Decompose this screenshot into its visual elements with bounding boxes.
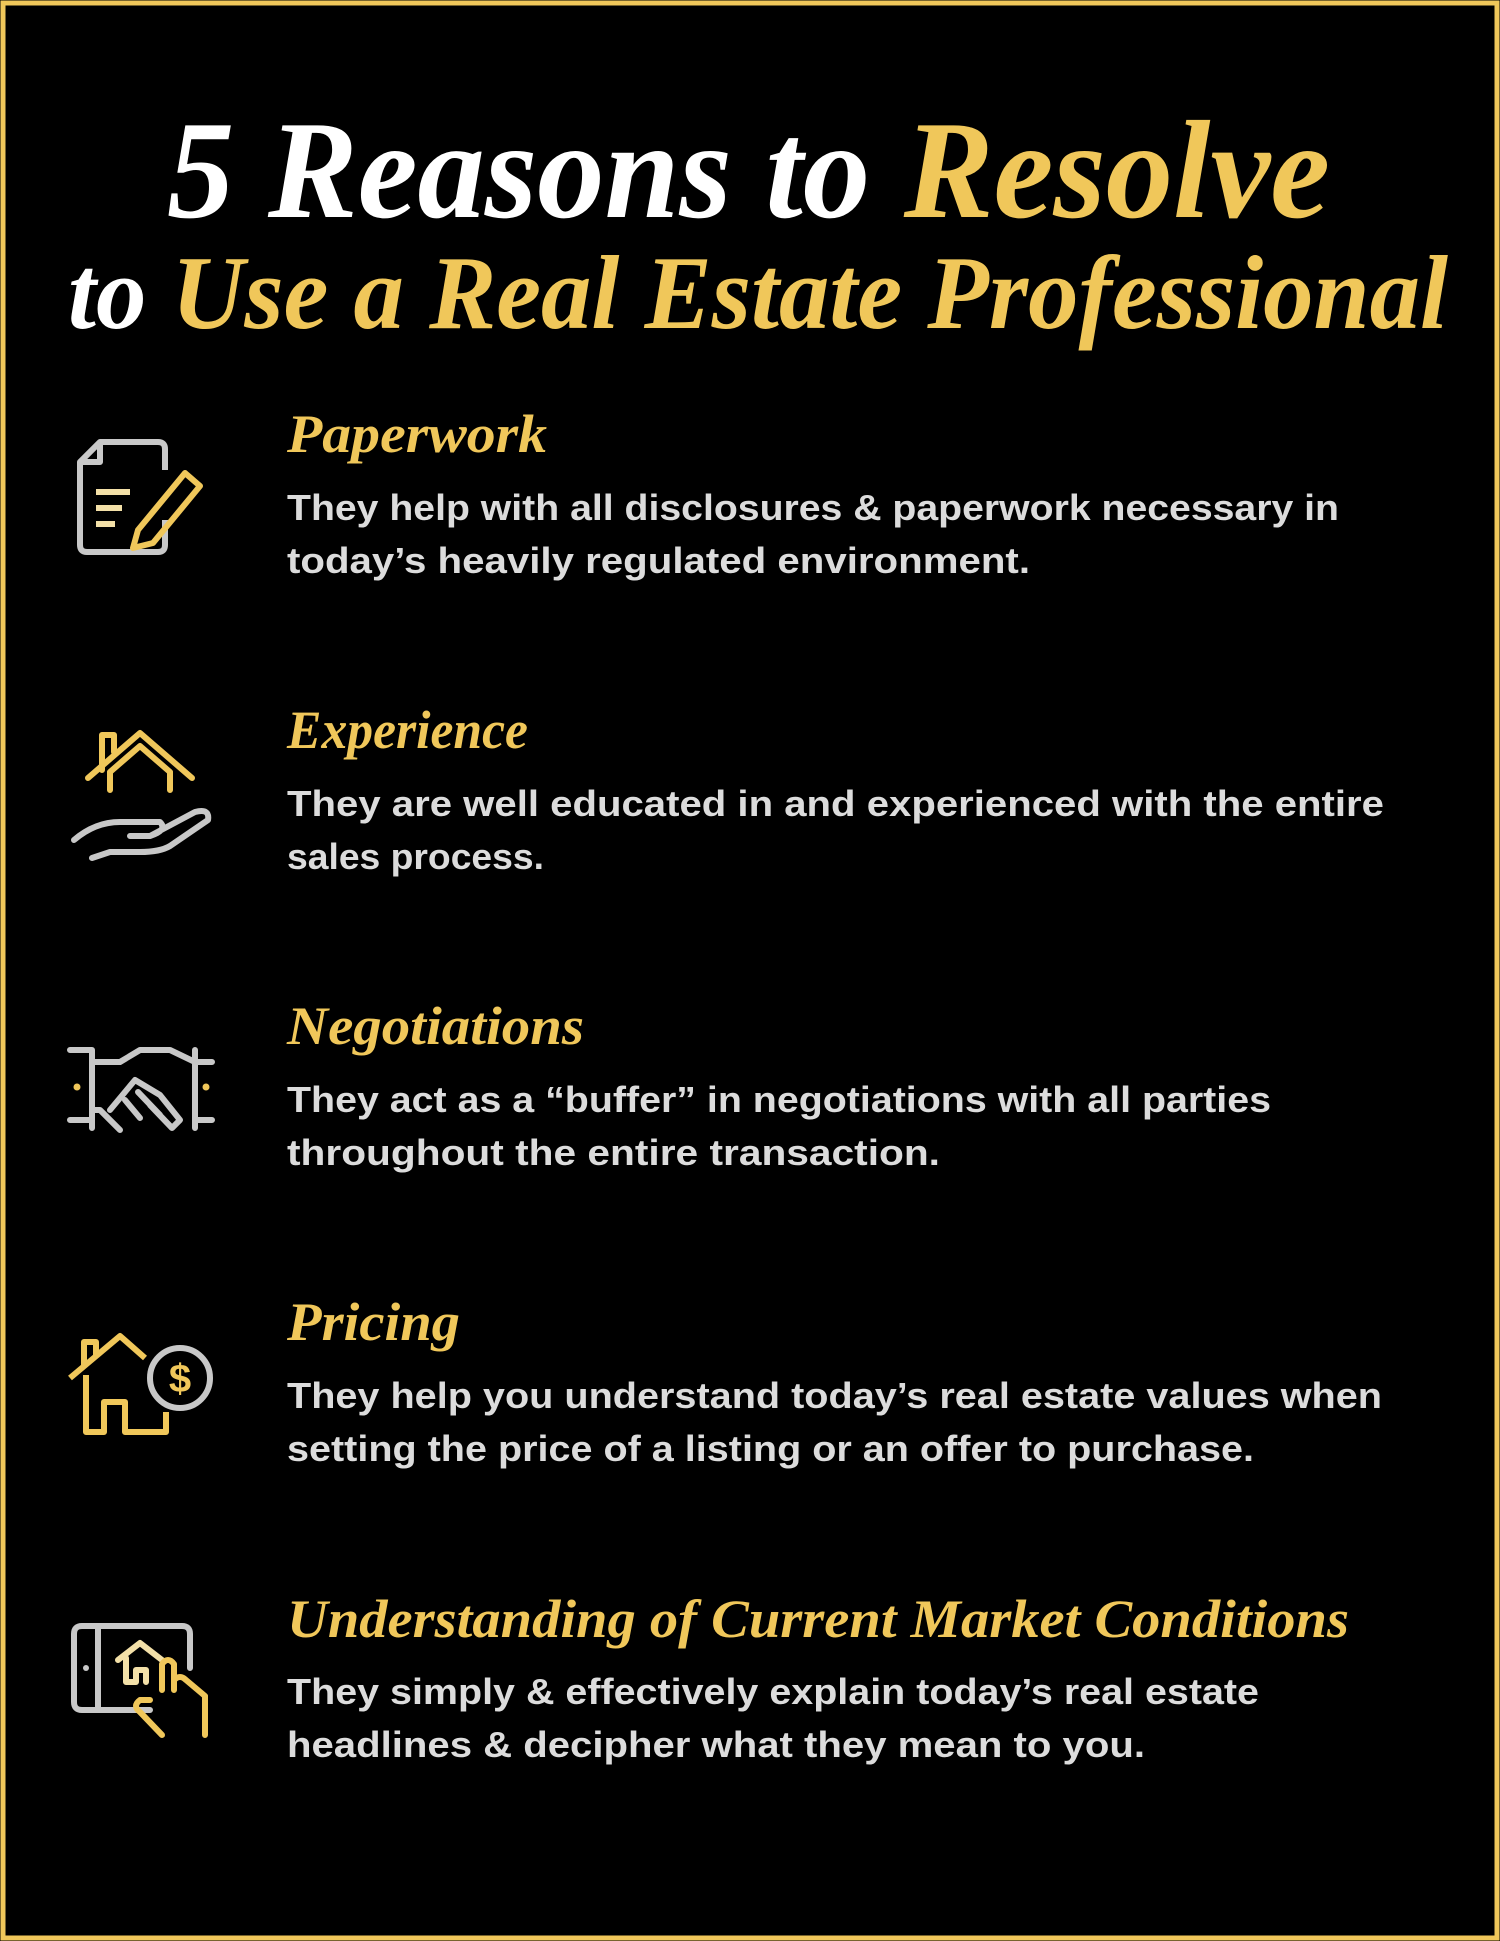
heading: Pricing: Pricing <box>286 1292 460 1352</box>
icon: house with dollar coin: $ <box>169 1357 191 1401</box>
text: experience: sales process. <box>287 836 544 877</box>
section: market conditions <box>74 1589 1349 1765</box>
icon: house with dollar coin <box>70 1336 210 1432</box>
text: negotiations <box>287 1079 1271 1173</box>
text: negotiations: They act as a “buffer” in negotiations with all parties <box>287 1079 1271 1120</box>
text: negotiations: throughout the entire transaction. <box>287 1132 940 1173</box>
text: market conditions: headlines & decipher what they mean to you. <box>287 1724 1145 1765</box>
text: pricing: They help you understand today’s real estate values when <box>287 1375 1382 1416</box>
title <box>68 93 1449 351</box>
title: to Use a Real Estate Professional <box>68 234 1449 351</box>
text: experience: They are well educated in and experienced with the entire <box>287 783 1384 824</box>
section: pricing <box>70 1292 1382 1469</box>
text: paperwork: They help with all disclosures & paperwork necessary in <box>287 487 1339 528</box>
heading: Understanding of Current Market Conditions: Understanding of Current Market Conditions <box>287 1589 1349 1649</box>
text: pricing: setting the price of a listing or an offer to purchase. <box>287 1428 1254 1469</box>
text: paperwork: today’s heavily regulated environment. <box>287 540 1030 581</box>
heading: Negotiations: Negotiations <box>286 996 584 1056</box>
icon: tablet with house and finger <box>74 1626 205 1735</box>
section: paperwork <box>80 404 1339 581</box>
text: paperwork <box>287 487 1339 581</box>
heading: Paperwork: Paperwork <box>286 404 547 464</box>
heading: Experience: Experience <box>286 700 528 760</box>
text: experience <box>287 783 1384 877</box>
section: experience <box>74 700 1384 877</box>
title: 5 Reasons to Resolve <box>167 93 1330 248</box>
text: market conditions: They simply & effectively explain today’s real estate <box>287 1671 1259 1712</box>
icon: handshake <box>70 1050 212 1130</box>
section: negotiations <box>70 996 1271 1173</box>
icon: house in hand <box>74 733 208 858</box>
text: market conditions <box>287 1671 1259 1765</box>
text: pricing <box>287 1375 1382 1469</box>
icon: document with pencil <box>80 442 200 552</box>
